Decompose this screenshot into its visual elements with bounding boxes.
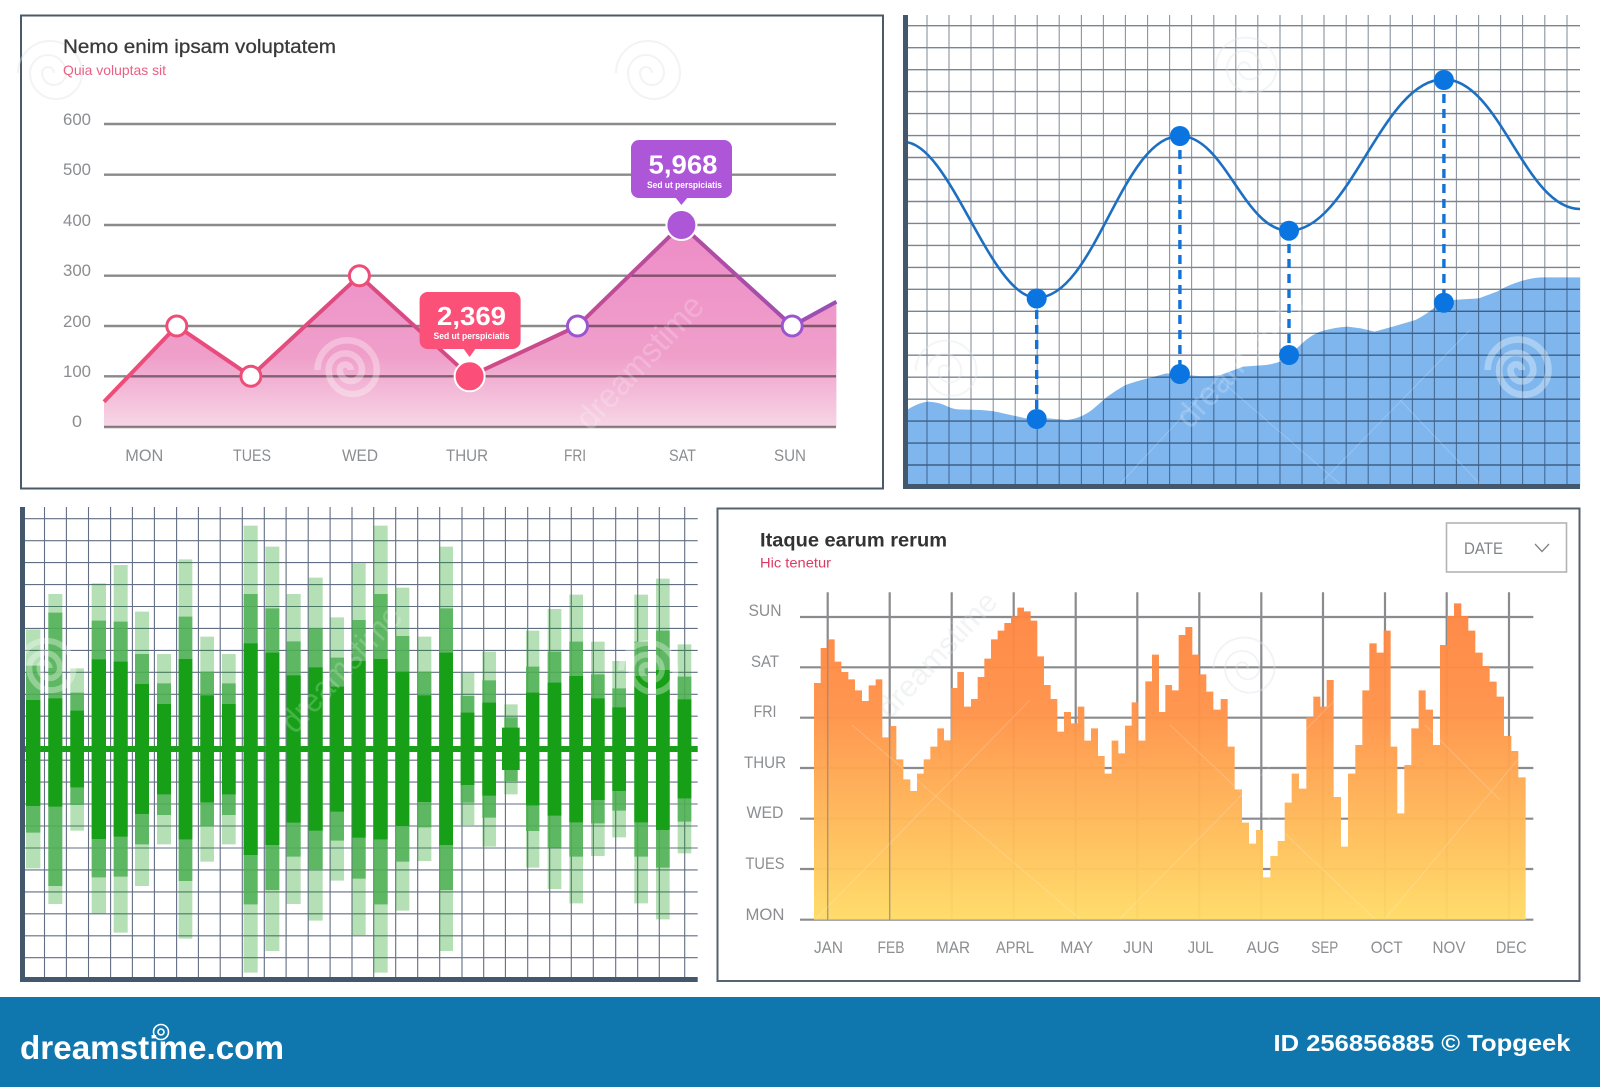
y axis labels: 0	[72, 412, 82, 431]
y axis labels: TUES	[746, 854, 784, 873]
x axis labels: MAR	[936, 938, 970, 957]
axes	[906, 15, 1580, 486]
x axis labels: SAT	[669, 446, 696, 465]
panel: pink area chart	[18, 16, 883, 488]
grid lines	[800, 592, 1533, 920]
panel: orange step chart	[718, 508, 1580, 981]
x axis labels: MON	[125, 446, 163, 465]
white watermark spiral on area	[1488, 340, 1548, 395]
x axis labels: WED	[342, 446, 378, 465]
x axis labels: AUG	[1246, 938, 1280, 957]
x axis labels: SEP	[1311, 938, 1338, 957]
faint diagonal watermark lines on area	[1120, 300, 1480, 484]
white watermark spiral on area	[318, 340, 377, 394]
data points	[167, 210, 802, 391]
y axis labels: 600	[63, 110, 91, 129]
date dropdown	[1446, 523, 1566, 572]
x axis labels: OCT	[1371, 938, 1403, 957]
grid	[927, 15, 1567, 484]
x axis labels: THUR	[446, 446, 488, 465]
bars, left half	[26, 526, 366, 973]
logo spiral	[154, 1024, 168, 1040]
area data points	[1027, 293, 1454, 429]
bars, right half	[374, 526, 691, 973]
x axis labels: MAY	[1060, 938, 1093, 957]
axes	[22, 507, 698, 980]
faint watermark spiral	[1214, 638, 1274, 693]
x axis labels: FEB	[878, 938, 904, 957]
x axis labels: APRL	[996, 938, 1034, 957]
panel: blue curve and area chart	[904, 15, 1580, 487]
y axis labels: 100	[63, 362, 91, 381]
x axis labels: FRI	[564, 446, 586, 465]
y axis labels: FRI	[754, 702, 776, 721]
dashed connectors	[1037, 94, 1444, 412]
watermark text: dreamstime	[273, 598, 410, 740]
horizontal grid lines	[104, 124, 836, 427]
data line	[104, 225, 836, 402]
y axis labels: THUR	[744, 753, 786, 772]
y axis labels: 500	[63, 160, 91, 179]
footer background	[0, 997, 1600, 1087]
subheading: Quia voluptas sit	[63, 62, 166, 78]
y axis labels	[744, 601, 786, 924]
y axis labels: MON	[746, 905, 784, 924]
horizontal grid lines	[25, 519, 698, 958]
callout: 5,968	[631, 140, 732, 205]
y axis labels: 400	[63, 211, 91, 230]
watermark text: dreamstime	[568, 287, 712, 437]
faint diagonal watermark lines on area	[816, 700, 1530, 919]
footer banner	[0, 997, 1600, 1087]
callout: 5,968: 5,968	[648, 150, 718, 180]
panel frame	[718, 508, 1580, 981]
watermark text: dreamstime	[1168, 285, 1312, 435]
subheading: Hic tenetur	[760, 554, 831, 570]
callout: 2,369: Sed ut perspiciatis	[434, 331, 510, 341]
y axis labels: 300	[63, 261, 91, 280]
heading: Nemo enim ipsam voluptatem	[63, 36, 336, 58]
white watermark spirals	[19, 641, 676, 692]
callout: 2,369: 2,369	[437, 301, 506, 331]
y axis labels: SAT	[751, 652, 779, 671]
stepped area	[814, 603, 1526, 920]
faint watermark spirals	[18, 41, 680, 99]
y axis labels: 200	[63, 312, 91, 331]
x axis labels: JUL	[1188, 938, 1214, 957]
x axis labels: DEC	[1496, 938, 1527, 957]
y axis labels: WED	[746, 803, 784, 822]
x axis labels: JUN	[1123, 938, 1153, 957]
logo wordmark: dreamstime.com	[20, 1029, 284, 1066]
x axis labels: TUES	[233, 446, 271, 465]
centre band	[25, 746, 698, 752]
x axis labels	[125, 446, 806, 465]
heading: Itaque earum rerum	[760, 530, 947, 552]
y axis labels: SUN	[748, 601, 782, 620]
x axis labels: SUN	[774, 446, 806, 465]
image credit: ID 256856885 © Topgeek	[1274, 1030, 1571, 1056]
blue area	[904, 277, 1580, 487]
smooth curve	[904, 79, 1580, 298]
faint watermark spirals	[916, 38, 1276, 396]
y axis labels	[63, 110, 91, 431]
watermark text: dreamstime	[871, 585, 1004, 725]
area fill	[104, 225, 836, 427]
horizontal grid lines	[908, 26, 1580, 465]
callout: 2,369	[420, 292, 521, 357]
curve data points	[1027, 70, 1454, 308]
strong month lines over area	[828, 640, 890, 920]
vertical grid lines	[44, 507, 685, 977]
x axis labels: JAN	[814, 938, 843, 957]
panel: green bar chart	[19, 507, 698, 980]
x axis labels	[814, 938, 1527, 957]
date dropdown: DATE	[1464, 539, 1503, 558]
x axis labels: NOV	[1432, 938, 1466, 957]
callout: 5,968: Sed ut perspiciatis	[647, 180, 722, 190]
panel frame	[21, 16, 883, 488]
